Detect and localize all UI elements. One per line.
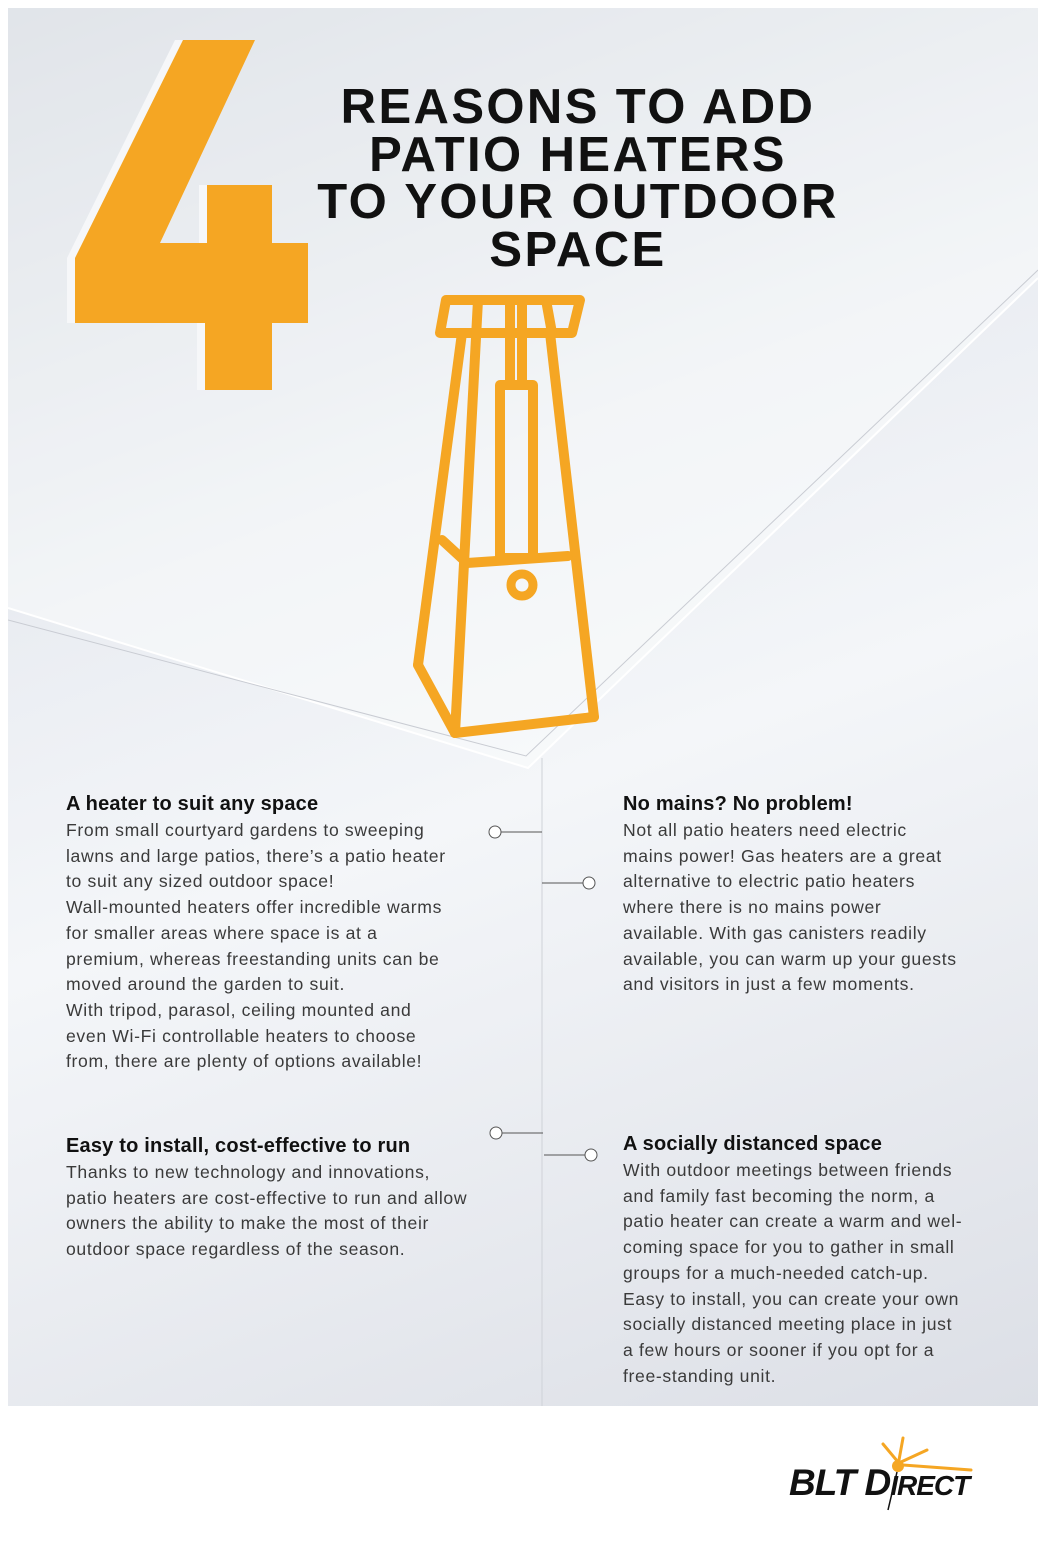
text block: socially distanced: coming space for you to gather in small [623, 1237, 954, 1257]
text block: no mains: available. With gas canisters readily [623, 923, 927, 943]
text block: no mains: alternative to electric patio heaters [623, 871, 915, 891]
title: REASONS TO ADD [341, 80, 815, 134]
title: SPACE [489, 222, 667, 276]
text block: easy to install: Thanks to new technology and innovations, [66, 1162, 430, 1182]
text block: no mains [623, 793, 957, 994]
text block: easy to install: outdoor space regardless of the season. [66, 1239, 405, 1259]
text block: a heater to suit any space [66, 793, 446, 1071]
text block: socially distanced: A socially distanced space [623, 1133, 882, 1155]
text block: easy to install: Easy to install, cost-effective to run [66, 1135, 410, 1157]
text block: a heater to suit any space: from, there are plenty of options available! [66, 1051, 422, 1071]
logo: BLT Direct: BLT DIRECT [789, 1462, 969, 1503]
text block: a heater to suit any space: From small courtyard gardens to sweeping [66, 820, 424, 840]
text block: easy to install: owners the ability to make the most of their [66, 1213, 429, 1233]
text block: a heater to suit any space: With tripod, parasol, ceiling mounted and [66, 1000, 411, 1020]
text block: socially distanced: a few hours or sooner if you opt for a [623, 1340, 934, 1360]
text block: a heater to suit any space: for smaller areas where space is at a [66, 923, 378, 943]
text block: a heater to suit any space: A heater to suit any space [66, 793, 318, 815]
text block: a heater to suit any space: Wall-mounted heaters offer incredible warms [66, 897, 442, 917]
text block: socially distanced: socially distanced meeting place in just [623, 1314, 952, 1334]
icon: patio heater [413, 295, 599, 738]
title: PATIO HEATERS [369, 128, 787, 182]
text block: socially distanced: groups for a much-needed catch-up. [623, 1263, 929, 1283]
text block: a heater to suit any space: moved around the garden to suit. [66, 974, 345, 994]
text block: no mains: mains power! Gas heaters are a great [623, 846, 942, 866]
text block: no mains: and visitors in just a few moments. [623, 974, 915, 994]
text block: easy to install: patio heaters are cost-effective to run and allow [66, 1188, 467, 1208]
text block: socially distanced: With outdoor meetings between friends [623, 1160, 952, 1180]
text block: a heater to suit any space: to suit any sized outdoor space! [66, 871, 334, 891]
text block: socially distanced: patio heater can create a warm and wel- [623, 1211, 962, 1231]
title: TO YOUR OUTDOOR [317, 175, 839, 229]
text block: no mains: No mains? No problem! [623, 793, 853, 815]
text block: no mains: where there is no mains power [623, 897, 881, 917]
logo: BLT Direct [789, 1436, 972, 1510]
text block: socially distanced: and family fast becoming the norm, a [623, 1186, 935, 1206]
big number 4 [67, 40, 308, 390]
text block: easy to install [66, 1135, 467, 1259]
text block: a heater to suit any space: lawns and large patios, there’s a patio heater [66, 846, 446, 866]
text block: socially distanced [623, 1133, 962, 1386]
text block: no mains: Not all patio heaters need electric [623, 820, 907, 840]
text block: no mains: available, you can warm up your guests [623, 949, 957, 969]
title [317, 80, 839, 276]
text block: socially distanced: free-standing unit. [623, 1366, 776, 1386]
text block: a heater to suit any space: even Wi-Fi controllable heaters to choose [66, 1026, 416, 1046]
text block: socially distanced: Easy to install, you can create your own [623, 1289, 959, 1309]
text block: a heater to suit any space: premium, whereas freestanding units can be [66, 949, 440, 969]
